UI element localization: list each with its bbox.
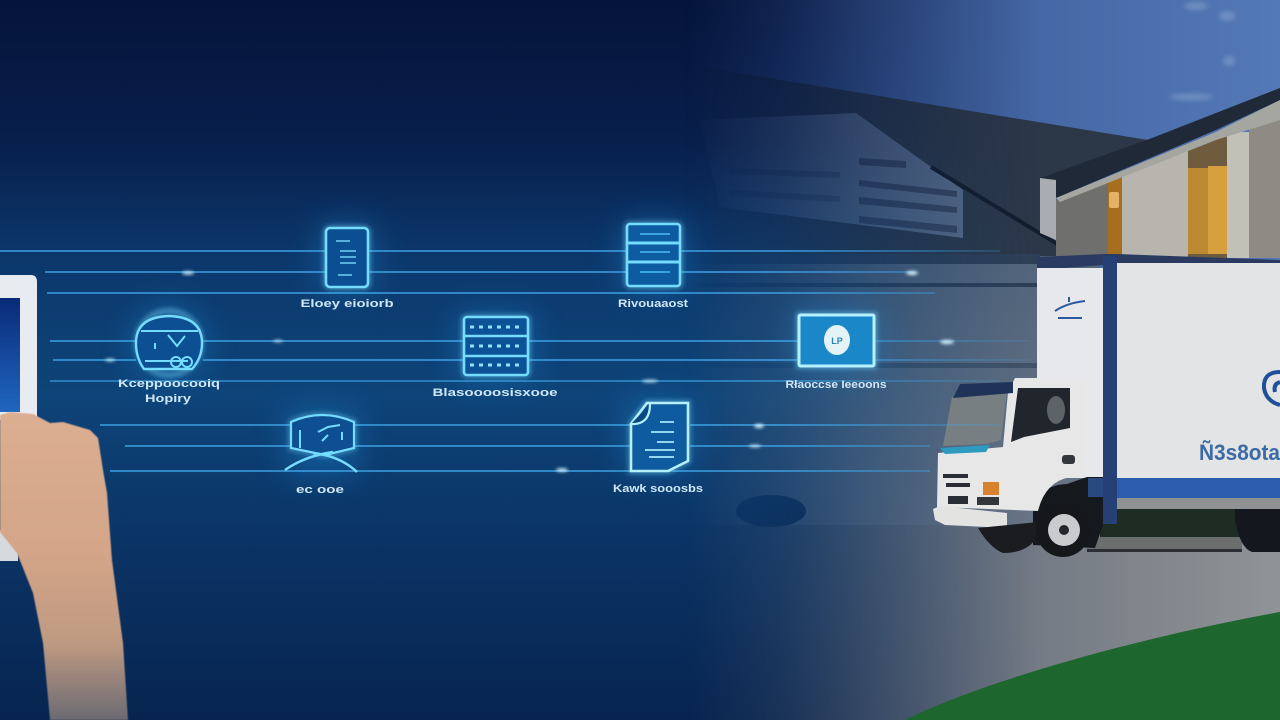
- far wall: [1249, 112, 1280, 258]
- grey skirt: [1117, 498, 1280, 509]
- tablet lower corner: [0, 530, 18, 561]
- windshield visor: [953, 382, 1013, 398]
- label: server stack: Rivouaaost: [618, 298, 688, 310]
- label: curled document: Kawk sooosbs: [613, 483, 703, 495]
- sky: [724, 0, 1280, 268]
- light wall: [1122, 148, 1188, 258]
- orange door: [1108, 178, 1122, 256]
- windshield: [943, 392, 1007, 446]
- main roof: [730, 72, 1148, 256]
- icon: helmet dome: [136, 311, 202, 375]
- roof valley: [930, 166, 1056, 246]
- window surround: [1188, 135, 1227, 258]
- tablet screen: [0, 298, 20, 412]
- large logo mark: [1264, 372, 1280, 405]
- dark shrub: [736, 495, 806, 527]
- front bumper: [933, 506, 1007, 528]
- fascia: [1056, 100, 1280, 202]
- light sparks: [105, 271, 954, 472]
- wheel arch dark: [1033, 477, 1103, 548]
- house right wing: [1040, 88, 1280, 258]
- grille bars: [943, 474, 970, 504]
- box pillar: [1103, 256, 1117, 524]
- left wing wall: [1056, 176, 1122, 258]
- hand holding tablet: [0, 412, 128, 720]
- label: helmet dome: Kceppoocooiq: [118, 378, 220, 390]
- icon: open box: [285, 415, 357, 472]
- door handle: [1062, 455, 1075, 464]
- label: helmet dome: Hopiry: [145, 393, 192, 405]
- tablet device: [0, 275, 37, 561]
- box top edge: [1037, 254, 1280, 270]
- label: data table: Blasoooosisxooe: [432, 387, 558, 399]
- hedge under box: [1100, 508, 1240, 538]
- clouds: [1169, 2, 1235, 100]
- grass lawn: [905, 612, 1280, 720]
- label: helmet dome: [118, 378, 220, 405]
- icon: screen with badge: [799, 315, 874, 366]
- label: screen with badge: Rłaoccse Ieeoons: [786, 379, 886, 391]
- gable edge post: [1040, 178, 1056, 240]
- teal dash trim: [940, 445, 990, 454]
- headlight: [977, 497, 999, 505]
- icon: server stack: [627, 224, 680, 286]
- box side panel: [1037, 268, 1104, 478]
- orange indicator: [983, 482, 999, 495]
- cab body: [937, 378, 1085, 511]
- pillar: [1227, 132, 1249, 258]
- data stream lines: [0, 251, 1030, 471]
- label: open box: ec ooe: [296, 484, 344, 496]
- front wheel: [1036, 503, 1090, 557]
- icon: curled document: [631, 403, 688, 471]
- lamp: [1109, 192, 1119, 208]
- gable louvres: [813, 158, 957, 233]
- dark eave: [1040, 88, 1280, 198]
- driveway: [732, 525, 1280, 720]
- delivery truck: [933, 254, 1280, 557]
- front lower dark: [978, 522, 1038, 553]
- glow halos: [131, 220, 879, 474]
- dormer gable panel: [734, 113, 963, 238]
- kerb: [1087, 537, 1242, 549]
- tablet frame: [0, 275, 37, 420]
- icon: screen with badge: LP: [831, 336, 843, 346]
- icon: data table: [464, 317, 528, 375]
- label: document tablet: Eloey eioiorb: [300, 298, 394, 310]
- house and driveway scene: [660, 0, 1280, 720]
- icon: document tablet: [326, 228, 368, 287]
- side window: [1011, 388, 1070, 442]
- blue stripe: [1117, 478, 1280, 498]
- lit window: [1188, 168, 1227, 254]
- window reflection: [1047, 396, 1065, 424]
- blue pillar foot: [1088, 478, 1103, 497]
- rear wheel: [1235, 508, 1280, 552]
- garage wall: [720, 238, 1100, 525]
- wall bands: [764, 254, 1040, 368]
- small logo: [1055, 297, 1085, 318]
- road shadow: [1087, 549, 1242, 552]
- main box panel: [1117, 263, 1280, 478]
